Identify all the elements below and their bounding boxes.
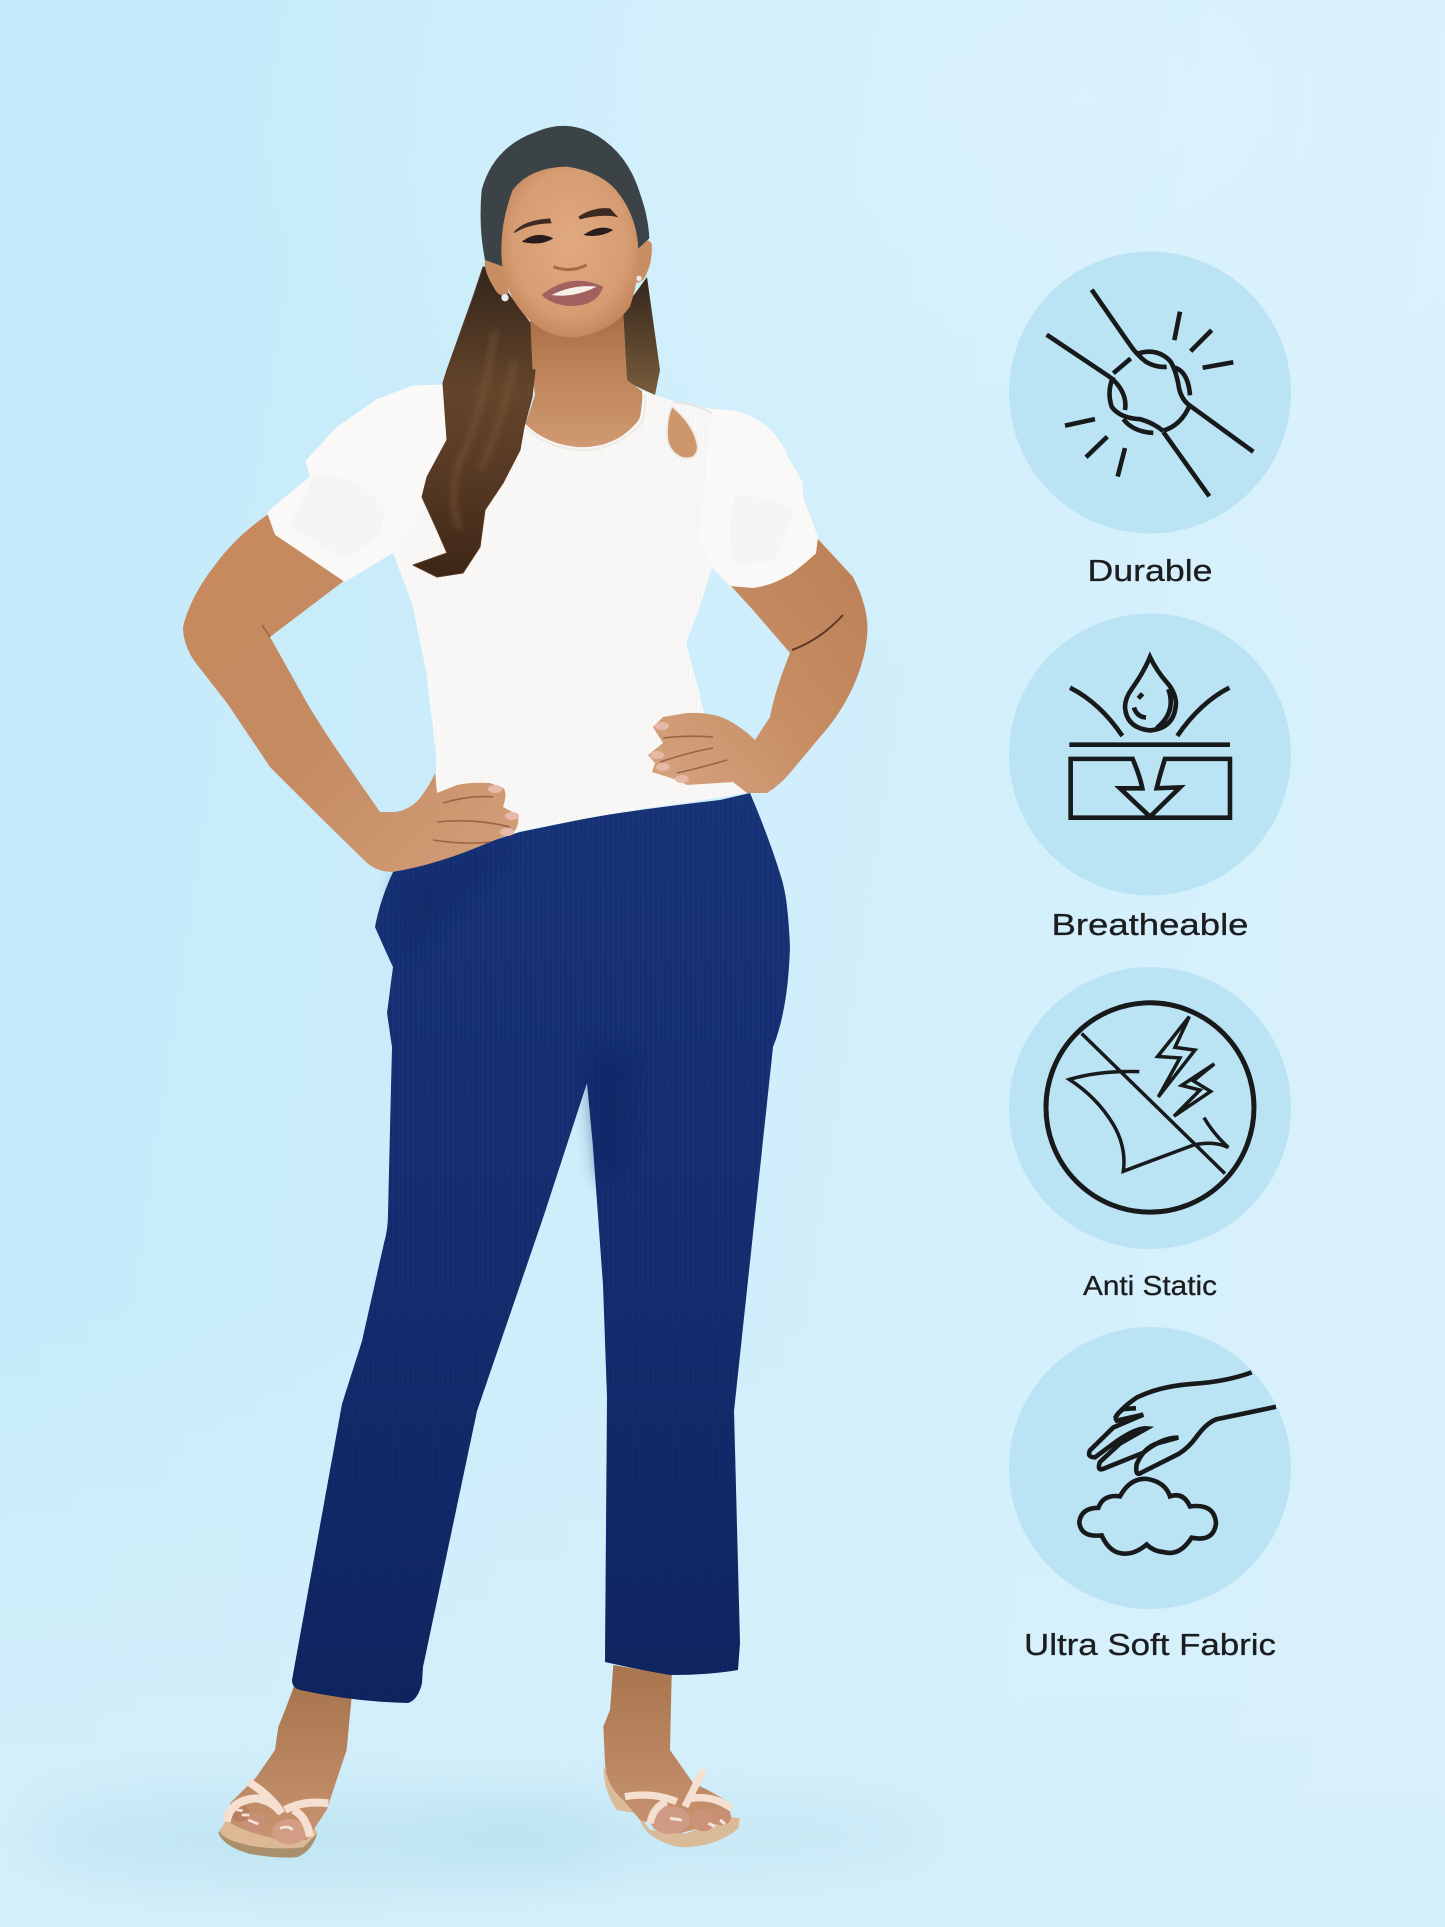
feature: anti static: [1009, 967, 1291, 1301]
white ribbed top: [393, 392, 745, 840]
label: breatheable: Breatheable: [1052, 907, 1248, 942]
left arm and hand: [183, 513, 519, 872]
durable circle: [1009, 252, 1291, 534]
face: [501, 167, 639, 337]
anti static circle: [1009, 967, 1291, 1249]
feature: durable: [1009, 252, 1291, 588]
label: anti static: Anti Static: [1083, 1270, 1217, 1301]
breatheable circle: [1009, 614, 1291, 896]
neck and chest: [525, 310, 643, 448]
facial features: [501, 208, 642, 306]
cutout keyhole: [667, 406, 698, 459]
right puff sleeve: [700, 410, 817, 587]
label: durable: Durable: [1088, 553, 1212, 588]
ears: [485, 240, 652, 296]
ultra soft circle: [1009, 1327, 1291, 1609]
feature: breatheable: [1009, 614, 1291, 942]
left foot and sandal: [218, 1683, 352, 1858]
right foot and sandal: [603, 1665, 740, 1847]
icon: durable knot: [1047, 290, 1253, 496]
woman figure: [183, 126, 867, 1858]
icon: hand over cloud: [1079, 1372, 1276, 1554]
icon: no static: [1046, 1003, 1254, 1212]
navy ribbed trousers: [292, 793, 790, 1703]
feature: ultra soft fabric: [1009, 1327, 1291, 1662]
label: ultra soft fabric: Ultra Soft Fabric: [1024, 1627, 1276, 1662]
head: [481, 126, 652, 337]
left puff sleeve: [270, 387, 452, 579]
right arm and hand: [648, 538, 867, 793]
hair base behind face: [481, 126, 649, 267]
long hair: [413, 267, 535, 577]
right hair behind: [623, 277, 660, 395]
icon: water drop on membrane: [1069, 657, 1230, 818]
